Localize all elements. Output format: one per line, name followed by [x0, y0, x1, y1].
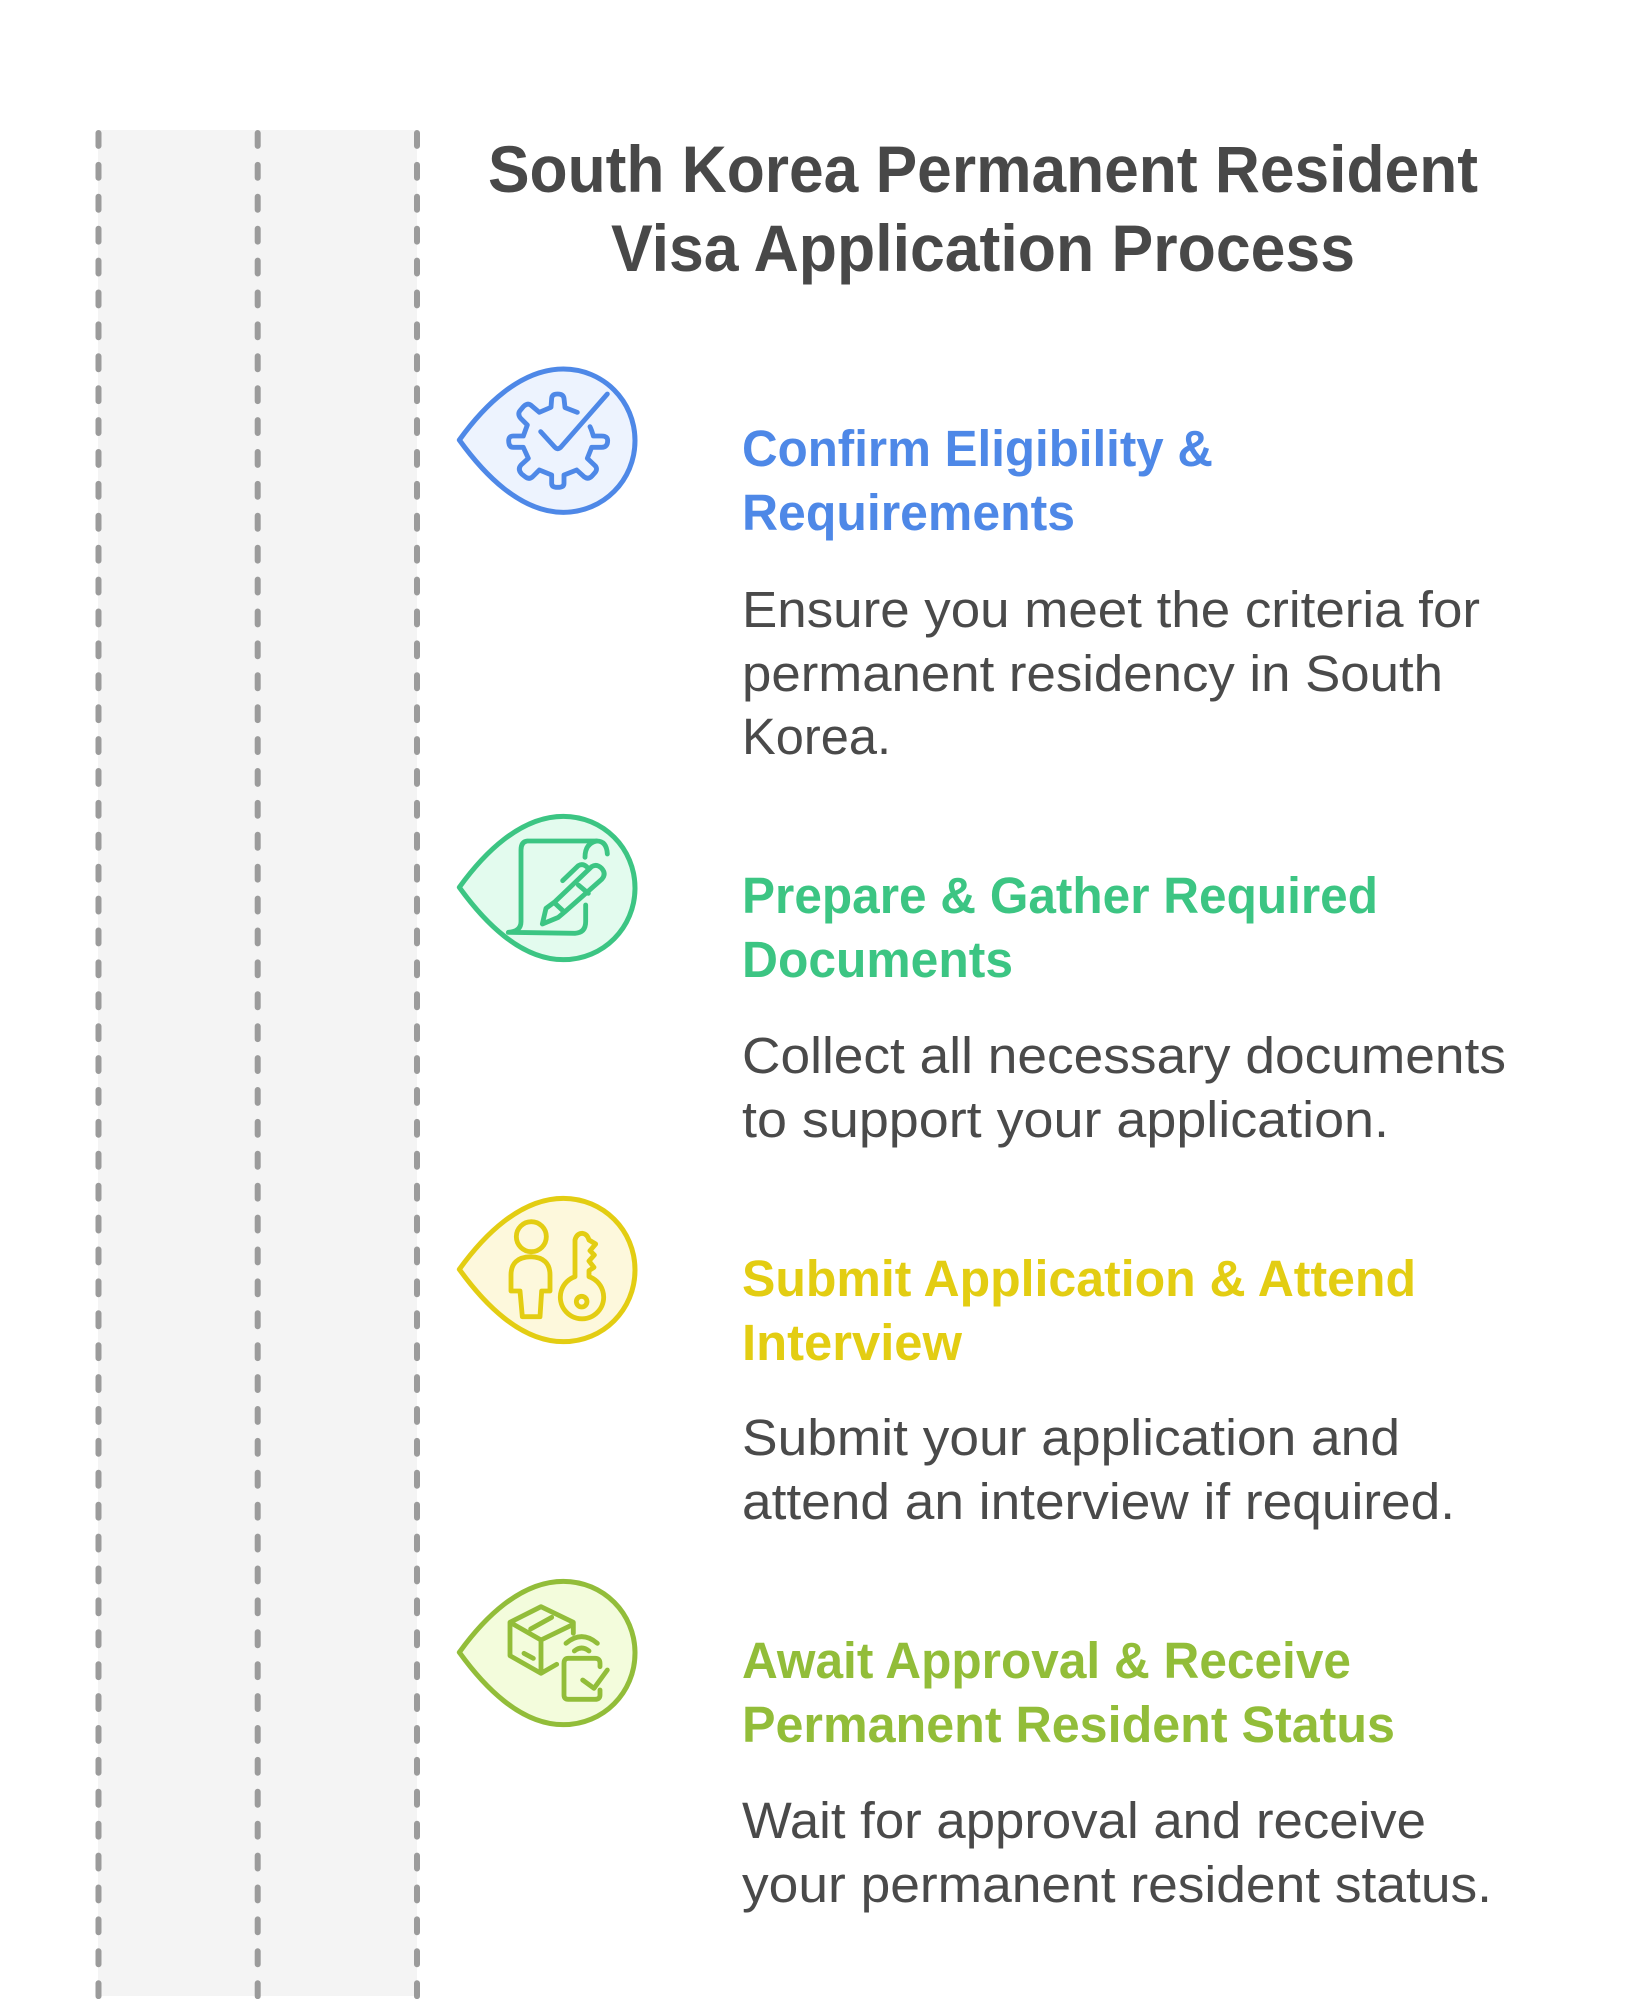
title: Visa Application Process [611, 211, 1355, 285]
heading: step 1: Requirements [742, 484, 1075, 541]
icon: person and key in yellow drop [459, 1198, 635, 1342]
description: step 3: attend an interview if required. [742, 1473, 1455, 1530]
description: step 2: to support your application. [742, 1091, 1389, 1148]
description: step 4 [742, 1792, 1492, 1913]
heading: step 3 [742, 1250, 1416, 1371]
step 3: submit application [459, 1198, 1455, 1530]
description: step 3: Submit your application and [742, 1409, 1400, 1466]
description: step 1: Ensure you meet the criteria for [742, 581, 1480, 638]
description: step 1: Korea. [742, 708, 891, 765]
heading: step 3: Interview [742, 1314, 962, 1371]
icon: document and pen in green drop [459, 816, 635, 960]
heading: step 2: Documents [742, 931, 1013, 988]
icon: gear with check mark in blue drop [459, 369, 635, 512]
step 1: confirm eligibility [459, 369, 1480, 765]
icon: parcel and approved tablet in lime drop [459, 1581, 635, 1725]
heading: step 2 [742, 867, 1378, 988]
heading: step 1 [742, 420, 1213, 541]
timeline band with dashed lines [98, 130, 417, 1999]
description: step 3 [742, 1409, 1455, 1530]
description: step 2 [742, 1027, 1506, 1148]
heading: step 3: Submit Application & Attend [742, 1250, 1416, 1307]
description: step 1 [742, 581, 1480, 765]
title: South Korea Permanent Resident [488, 132, 1478, 206]
heading: step 2: Prepare & Gather Required [742, 867, 1378, 924]
title [488, 132, 1478, 285]
description: step 2: Collect all necessary documents [742, 1027, 1506, 1084]
heading: step 4: Permanent Resident Status [742, 1696, 1395, 1753]
description: step 4: your permanent resident status. [742, 1856, 1492, 1913]
description: step 1: permanent residency in South [742, 645, 1443, 702]
heading: step 4: Await Approval & Receive [742, 1632, 1351, 1689]
description: step 4: Wait for approval and receive [742, 1792, 1426, 1849]
heading: step 4 [742, 1632, 1395, 1753]
heading: step 1: Confirm Eligibility & [742, 420, 1213, 477]
step 4: await approval [459, 1581, 1492, 1913]
step 2: prepare documents [459, 816, 1506, 1148]
